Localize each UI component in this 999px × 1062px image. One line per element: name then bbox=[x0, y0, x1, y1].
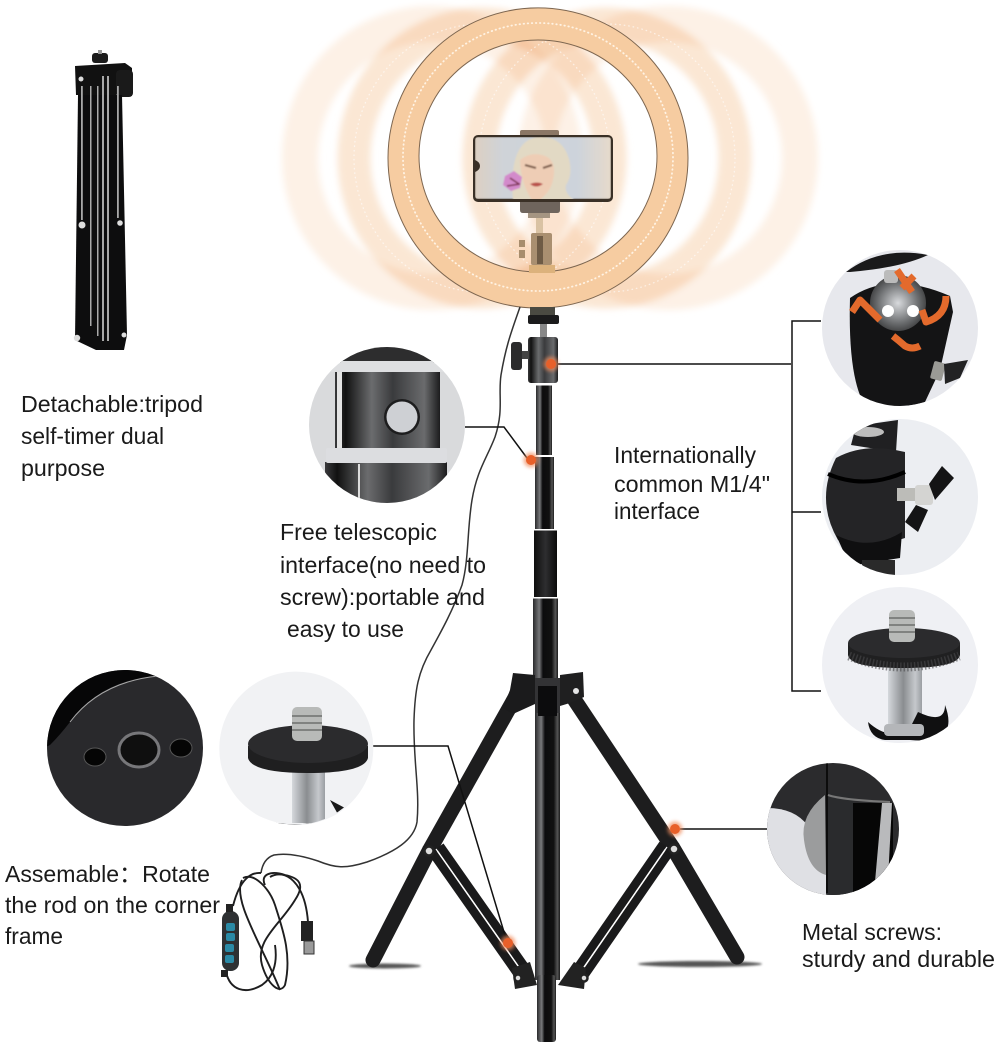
text: M1/4 interface: common M1/4" bbox=[614, 471, 770, 497]
callout circle: tripod screw bbox=[219, 672, 373, 825]
main ring bbox=[388, 8, 688, 308]
text: telescopic interface bbox=[280, 519, 486, 642]
centre column bbox=[536, 384, 552, 456]
text: assemable: frame bbox=[5, 923, 63, 949]
text: metal screws bbox=[802, 919, 995, 972]
callout circle: ball head rotation bbox=[822, 250, 978, 407]
callout circle: locking knob bbox=[822, 419, 978, 576]
orange marker dots bbox=[500, 356, 682, 950]
dimmer remote bbox=[222, 911, 239, 971]
power cable bbox=[261, 307, 520, 873]
lower brace hubs bbox=[512, 962, 537, 989]
phone on holder bbox=[473, 130, 613, 273]
legs bbox=[373, 690, 737, 976]
text: detachable tripod: purpose bbox=[21, 455, 105, 481]
orange rotation arrows bbox=[852, 270, 946, 348]
text: M1/4 interface bbox=[614, 442, 770, 524]
text: assemable: Assemable：Rotate bbox=[5, 861, 210, 887]
text: detachable tripod: self-timer dual bbox=[21, 423, 164, 449]
cable coil with dimmer remote and USB plug bbox=[221, 873, 314, 990]
text: detachable tripod: Detachable:tripod bbox=[21, 391, 203, 417]
side screw bbox=[930, 361, 946, 381]
connector lines bbox=[373, 321, 821, 942]
USB plug bbox=[301, 921, 313, 941]
pivot screws bbox=[424, 844, 678, 982]
floor shadows bbox=[349, 961, 762, 968]
braces bbox=[432, 852, 519, 976]
ball head under ring bbox=[511, 307, 559, 383]
thumb screw bbox=[897, 488, 917, 501]
ring light with motion glow bbox=[300, 8, 800, 308]
text: metal screws: Metal screws: bbox=[802, 919, 942, 945]
text: telescopic interface: interface(no need to bbox=[280, 552, 486, 578]
text: assemable: the rod on the corner bbox=[5, 892, 220, 918]
text: detachable tripod bbox=[21, 391, 203, 481]
callout circle: telescopic interface bbox=[309, 345, 465, 507]
text: M1/4 interface: interface bbox=[614, 498, 700, 524]
leg hub bbox=[503, 673, 535, 714]
phone clamp bbox=[520, 130, 559, 138]
LED dots bbox=[403, 23, 673, 291]
ball mount inside ring bbox=[536, 218, 543, 233]
text: assemable bbox=[5, 861, 220, 949]
glow: shifted ghost rings bbox=[300, 24, 800, 292]
folded tripod bbox=[74, 50, 133, 350]
callout circle: metal screw bbox=[767, 763, 899, 898]
text: metal screws: sturdy and durable bbox=[802, 946, 995, 972]
callout circle: thumb screw bbox=[822, 587, 978, 743]
phone body bbox=[473, 135, 613, 202]
phone notch bbox=[475, 160, 480, 172]
text: telescopic interface: Free telescopic bbox=[280, 519, 437, 545]
callout circle: mounting holes bbox=[40, 670, 203, 826]
phone screen portrait bbox=[475, 137, 611, 200]
text: telescopic interface: easy to use bbox=[287, 616, 404, 642]
text: telescopic interface: screw):portable and bbox=[280, 584, 485, 610]
ghost LED dots bbox=[354, 24, 735, 292]
text: M1/4 interface: Internationally bbox=[614, 442, 756, 468]
tripod stand bbox=[349, 384, 762, 1042]
